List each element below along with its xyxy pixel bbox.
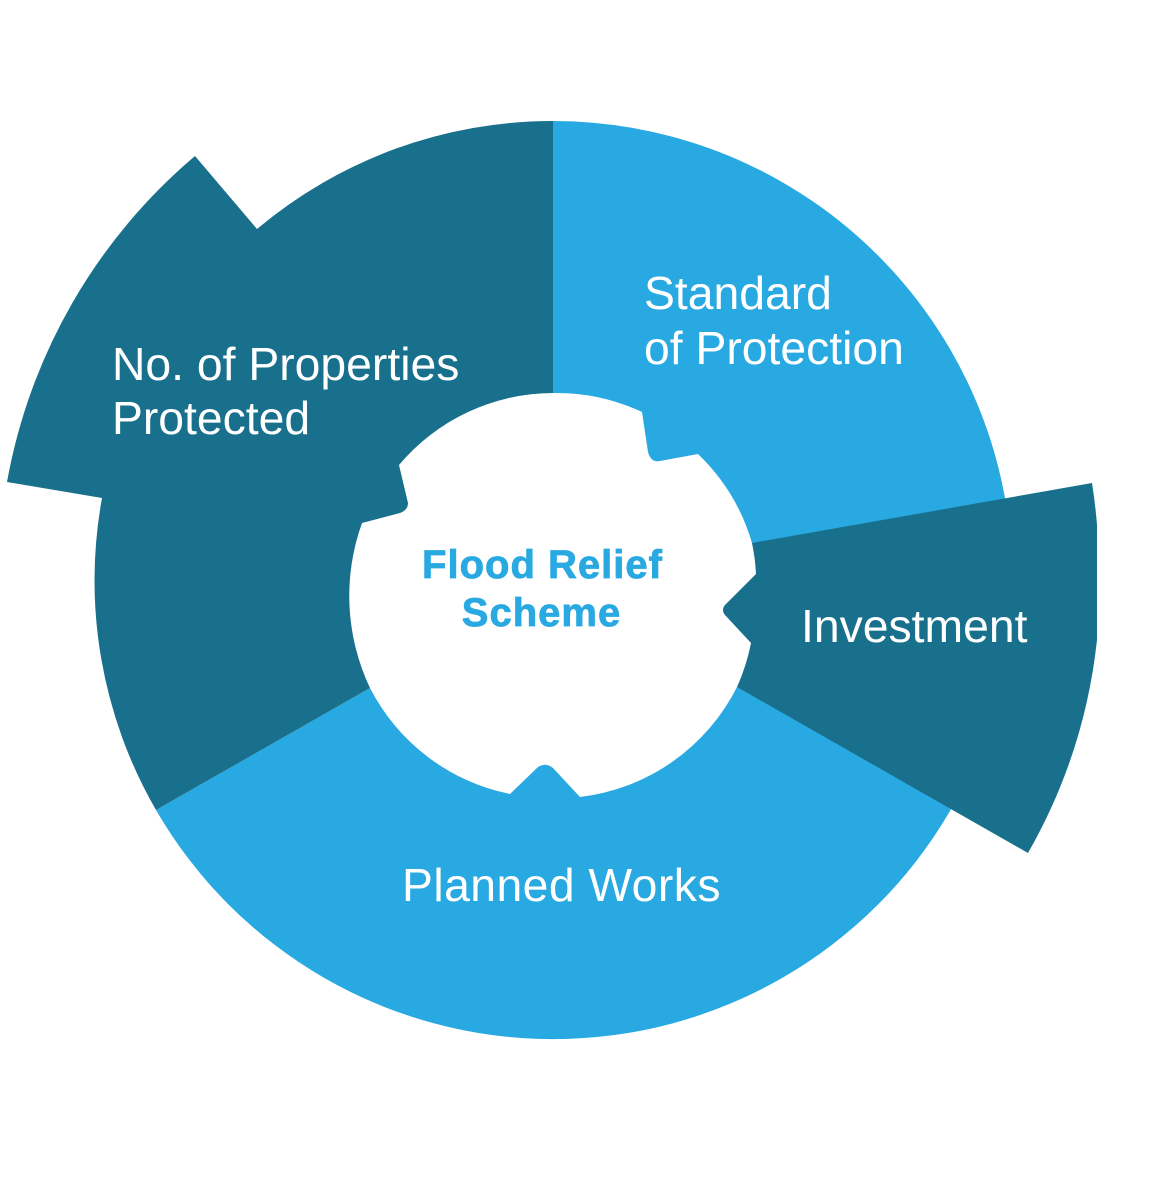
- segment: No. of Properties Protected: [7, 121, 553, 810]
- label: No. of Properties Protected: No. of Properties: [112, 338, 459, 390]
- segment: Standard of Protection: [553, 121, 1005, 552]
- label: Standard of Protection: of Protection: [644, 322, 904, 374]
- segment: Investment: [723, 483, 1097, 853]
- label: No. of Properties Protected: Protected: [112, 392, 310, 444]
- centre title: Scheme: [462, 591, 621, 635]
- label: Planned Works: Planned Works: [402, 859, 721, 911]
- label: Standard of Protection: Standard: [644, 267, 832, 319]
- label: Investment: Investment: [801, 600, 1028, 652]
- centre title: Flood Relief: [422, 543, 663, 587]
- segment: Planned Works: [156, 680, 955, 1039]
